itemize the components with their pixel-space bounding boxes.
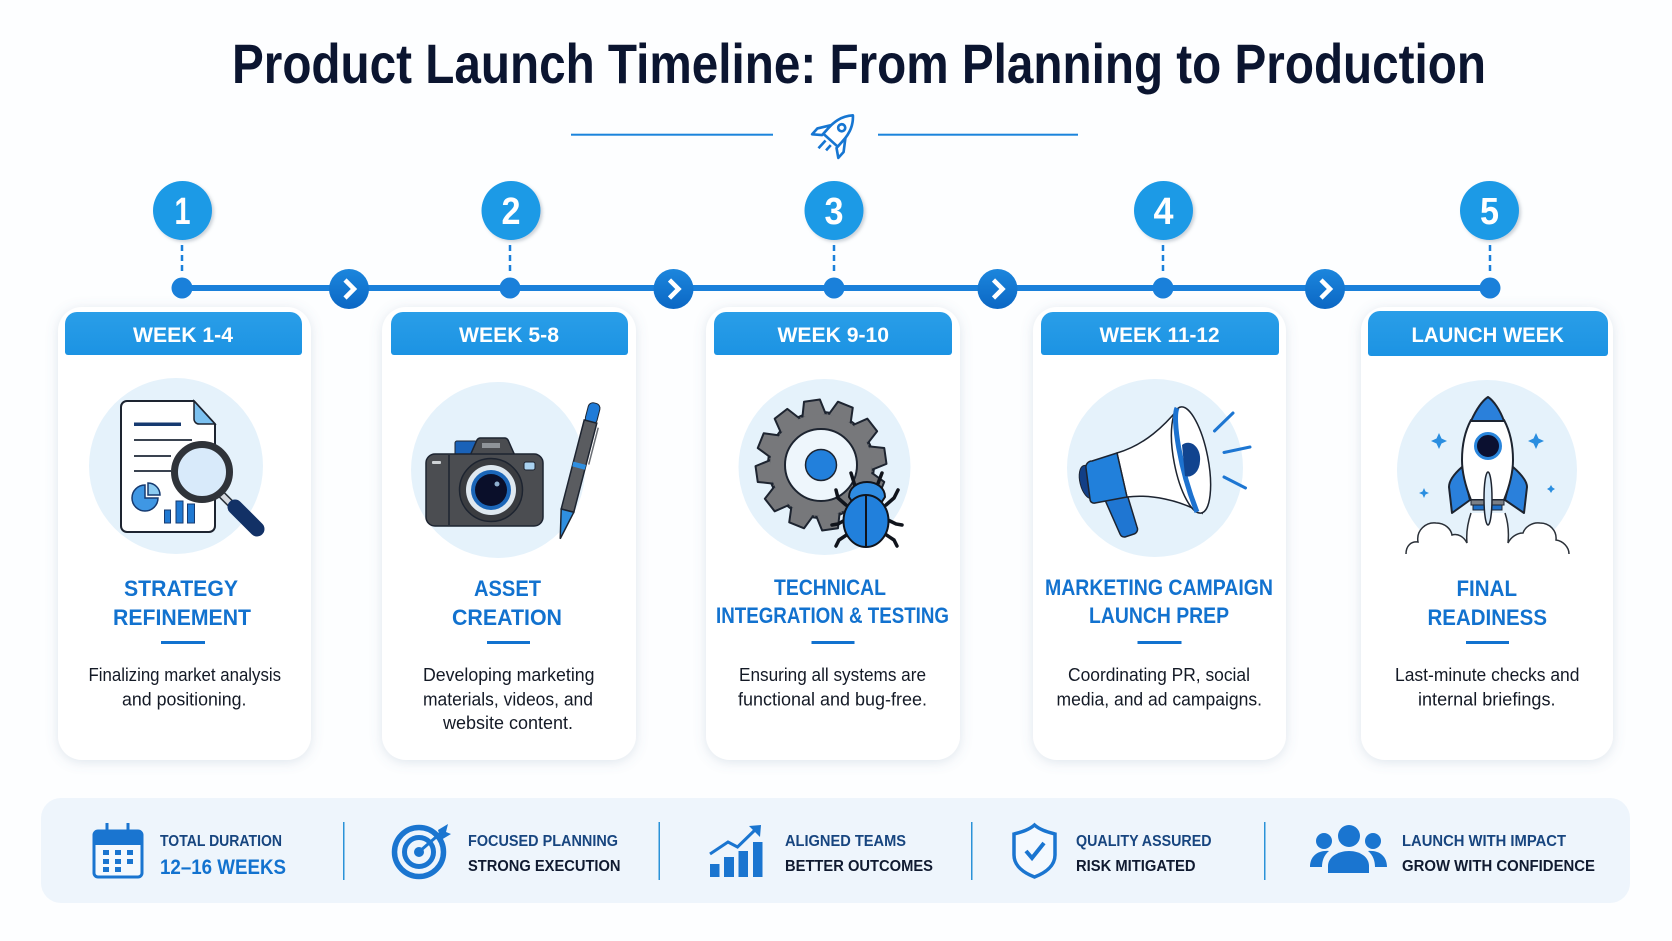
- icon: growth chart: [710, 825, 762, 877]
- step 4 marker: [1134, 181, 1193, 298]
- description: Last-minute checks and: [1395, 665, 1580, 685]
- heading: INTEGRATION & TESTING: [716, 603, 949, 628]
- heading: REFINEMENT: [113, 605, 252, 630]
- arrow 2: [654, 269, 694, 309]
- summary: launch with impact: GROW WITH CONFIDENCE: [1402, 858, 1595, 875]
- description: [423, 665, 594, 733]
- heading: ASSET: [474, 576, 542, 601]
- heading: STRATEGY: [124, 576, 238, 601]
- icon: gear and bug: [738, 379, 910, 555]
- summary: focused planning: [394, 824, 620, 876]
- description: Finalizing market analysis: [88, 665, 281, 685]
- description: [88, 665, 281, 710]
- arrow 1: [329, 269, 369, 309]
- summary: quality assured: [1014, 825, 1212, 877]
- icon: target: [394, 824, 451, 876]
- step 2 marker: 2: [502, 191, 520, 233]
- summary: total duration: [94, 823, 286, 879]
- title: Product Launch Timeline: From Planning to Production: [232, 32, 1486, 95]
- icon: document with magnifier: [89, 378, 263, 554]
- heading: [716, 575, 949, 628]
- summary: focused planning: STRONG EXECUTION: [468, 858, 620, 875]
- heading: MARKETING CAMPAIGN: [1045, 575, 1273, 600]
- week badge: [1041, 312, 1279, 355]
- panel: marketing campaign launch prep: [1033, 307, 1286, 760]
- panel: summary bar: [41, 798, 1630, 903]
- description: functional and bug-free.: [738, 690, 927, 710]
- description: [1056, 665, 1262, 710]
- step 3 marker: 3: [824, 191, 844, 233]
- icon: calendar: [94, 823, 142, 877]
- icon: shield check: [1014, 825, 1055, 877]
- description: Coordinating PR, social: [1068, 665, 1250, 685]
- week badge: LAUNCH WEEK: [1412, 324, 1564, 347]
- panel: asset creation: [382, 307, 636, 760]
- week badge: [391, 312, 628, 355]
- description: and positioning.: [122, 690, 246, 710]
- summary: launch with impact: LAUNCH WITH IMPACT: [1402, 833, 1566, 850]
- step 5 marker: [1460, 181, 1519, 298]
- summary: aligned teams: BETTER OUTCOMES: [785, 858, 933, 875]
- step 2 marker: [482, 181, 540, 298]
- week badge: WEEK 11-12: [1100, 324, 1220, 347]
- panel: technical integration and testing: [706, 307, 960, 760]
- heading: CREATION: [452, 605, 562, 630]
- icon: team: [1310, 825, 1387, 873]
- heading: LAUNCH PREP: [1089, 603, 1229, 628]
- heading: READINESS: [1428, 605, 1547, 630]
- icon: rocket with clouds: [1397, 380, 1577, 568]
- week badge: WEEK 9-10: [778, 324, 889, 347]
- summary: total duration: 12–16 WEEKS: [160, 856, 286, 879]
- heading: [113, 576, 252, 630]
- summary: focused planning: FOCUSED PLANNING: [468, 833, 618, 850]
- summary: aligned teams: ALIGNED TEAMS: [785, 833, 906, 850]
- summary: total duration: TOTAL DURATION: [160, 833, 282, 850]
- step 3 marker: [804, 181, 864, 298]
- description: [738, 665, 927, 710]
- heading: [452, 576, 562, 630]
- arrow 4: [1305, 269, 1345, 309]
- icon: megaphone: [1067, 379, 1250, 557]
- panel: strategy refinement: [58, 307, 311, 760]
- summary: quality assured: QUALITY ASSURED: [1076, 833, 1212, 850]
- timeline line: [182, 285, 1490, 291]
- step 1 marker: 1: [174, 191, 190, 233]
- step 5 marker: 5: [1480, 191, 1499, 233]
- description: media, and ad campaigns.: [1056, 690, 1262, 710]
- timeline: [153, 181, 1519, 309]
- week badge: [65, 312, 302, 355]
- summary: launch with impact: [1310, 825, 1595, 875]
- step 1 marker: [153, 181, 212, 298]
- week badge: [714, 312, 952, 355]
- icon: small rocket: [808, 104, 866, 162]
- description: Developing marketing: [423, 665, 594, 685]
- heading: FINAL: [1456, 576, 1517, 601]
- summary: aligned teams: [710, 825, 933, 877]
- arrow 3: [978, 269, 1018, 309]
- title ornament: divider with rocket: [571, 104, 1078, 162]
- heading: [1045, 575, 1273, 628]
- description: Ensuring all systems are: [739, 665, 926, 685]
- panel: final readiness: [1361, 307, 1613, 760]
- heading: [1428, 576, 1547, 630]
- week badge: WEEK 5-8: [459, 324, 559, 347]
- week badge: WEEK 1-4: [133, 324, 233, 347]
- step 4 marker: 4: [1154, 191, 1174, 233]
- icon: camera and pen: [411, 382, 604, 558]
- description: internal briefings.: [1418, 690, 1556, 710]
- summary: quality assured: RISK MITIGATED: [1076, 858, 1196, 875]
- week badge: [1368, 311, 1608, 356]
- description: [1395, 665, 1580, 710]
- description: materials, videos, and: [423, 690, 593, 710]
- description: website content.: [442, 713, 573, 733]
- heading: TECHNICAL: [774, 575, 886, 600]
